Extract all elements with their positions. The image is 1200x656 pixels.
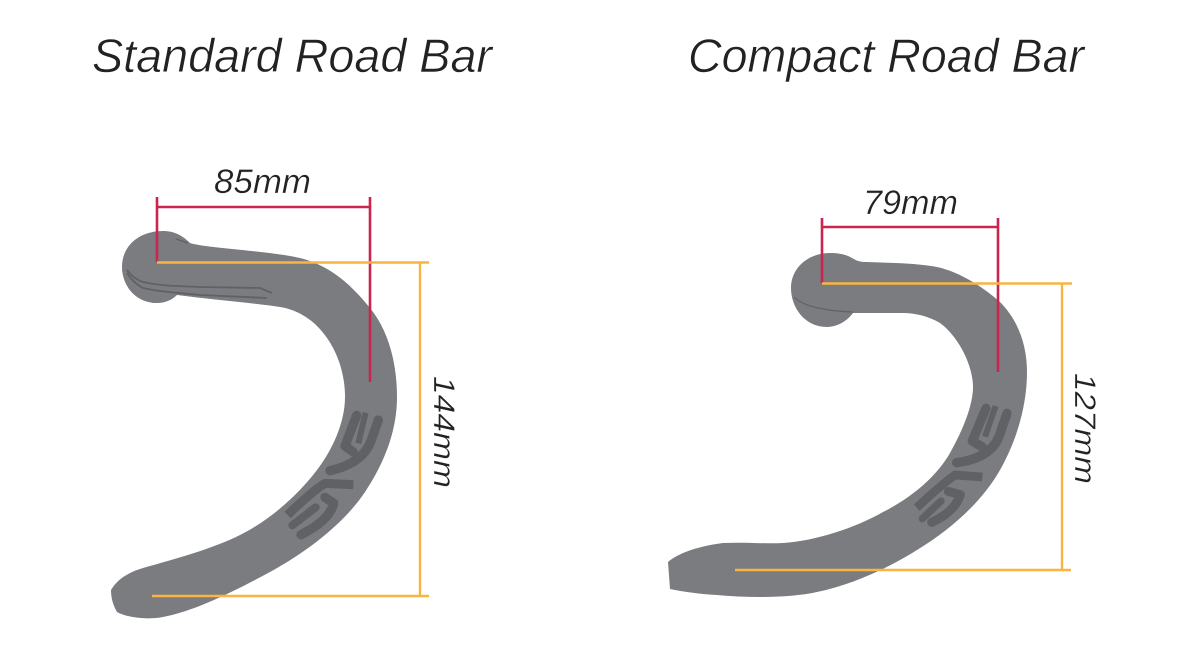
logo: ENVE on standard bar xyxy=(288,413,378,535)
handlebar: standard silhouette xyxy=(111,231,397,618)
logo: ENVE on compact bar xyxy=(917,406,1007,522)
panel: standard road bar xyxy=(92,29,494,618)
label: 144mm: 144mm xyxy=(427,376,460,488)
handlebar: compact silhouette xyxy=(668,253,1027,597)
label: 79mm: 79mm xyxy=(863,184,958,222)
heading: Standard Road Bar: Standard Road Bar xyxy=(92,29,494,82)
label: 85mm: 85mm xyxy=(214,163,311,201)
panel: compact road bar xyxy=(668,29,1101,597)
dimension: 144mm drop in orange xyxy=(152,262,429,596)
dimension: 79mm reach in red xyxy=(822,218,998,372)
dimension: 85mm reach in red xyxy=(157,197,370,382)
heading: Compact Road Bar: Compact Road Bar xyxy=(688,29,1086,82)
dimension: 127mm drop in orange xyxy=(735,283,1072,570)
label: 127mm: 127mm xyxy=(1068,373,1101,484)
